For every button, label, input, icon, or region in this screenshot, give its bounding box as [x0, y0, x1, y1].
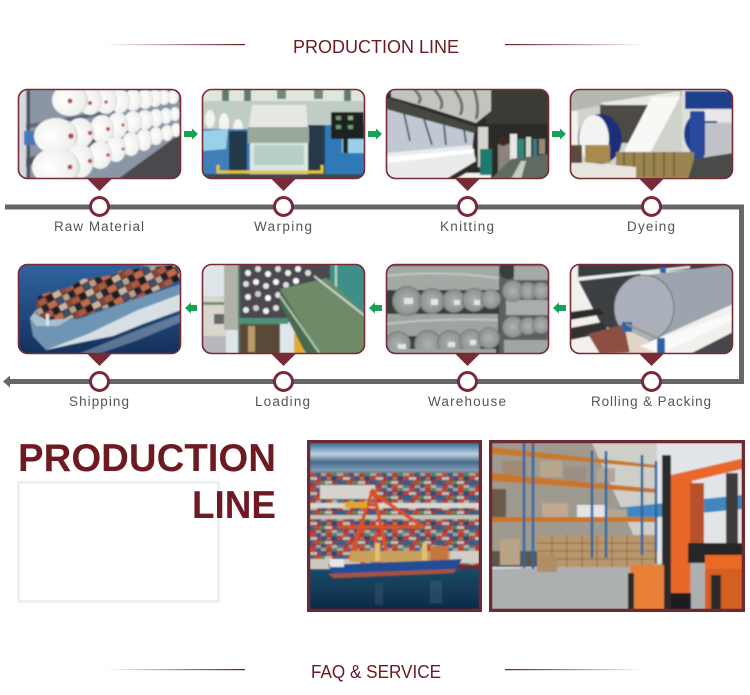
photo: warping machine: [202, 89, 365, 179]
arrow: knitting to dyeing: [552, 128, 566, 140]
photo: stacked fabric rolls: [385, 261, 550, 358]
pointer: [456, 354, 480, 366]
photo: container ship: [18, 264, 181, 354]
node: [274, 372, 292, 390]
node: [642, 372, 660, 390]
arrow: raw material to warping: [184, 128, 198, 140]
node: [90, 198, 108, 216]
step 3: knitting: [386, 89, 549, 234]
pointer: [640, 354, 664, 366]
pointer: [640, 179, 664, 191]
label: Loading: [255, 394, 310, 409]
pointer: [88, 354, 112, 366]
large heading: production line: LINE: [192, 484, 276, 527]
label: Dyeing: [627, 219, 675, 234]
step 6: warehouse: [385, 261, 550, 409]
large heading: production line: [18, 437, 276, 527]
top heading: production line: PRODUCTION LINE: [293, 37, 459, 57]
photo: yarn spools: [18, 88, 182, 180]
label: Rolling & Packing: [591, 394, 711, 409]
node: [90, 372, 108, 390]
step 8: shipping: [18, 264, 181, 409]
step 2: warping: [202, 89, 365, 234]
photo: warehouse with forklift: [489, 440, 745, 612]
photo: dyeing machinery: [570, 89, 733, 179]
label: Raw Material: [54, 219, 144, 234]
node: [274, 198, 292, 216]
arrow: rolling to warehouse: [553, 302, 566, 314]
pointer: [456, 179, 480, 191]
photo: loading conveyor: [202, 264, 365, 354]
pointer: [88, 179, 112, 191]
arrow: loading to shipping: [185, 302, 197, 314]
pointer: [272, 354, 296, 366]
photo: rolling machine: [570, 264, 733, 354]
node: [458, 372, 476, 390]
arrow: warping to knitting: [368, 128, 382, 140]
photo: knitting hall: [386, 89, 549, 179]
timeline path: [3, 204, 744, 388]
label: Warehouse: [428, 394, 506, 409]
step 5: rolling and packing: [570, 264, 733, 409]
arrow: warehouse to loading: [369, 302, 382, 314]
photo: container port: [307, 440, 482, 612]
large heading: production line: PRODUCTION: [18, 437, 276, 480]
label: Shipping: [69, 394, 129, 409]
step 4: dyeing: [570, 89, 733, 234]
step 1: raw material: [18, 84, 181, 234]
bottom heading: faq and service: FAQ & SERVICE: [311, 662, 441, 682]
step 7: loading: [202, 264, 365, 409]
label: Knitting: [440, 219, 494, 234]
empty outlined box: [18, 482, 218, 602]
node: [642, 198, 660, 216]
label: Warping: [254, 219, 312, 234]
pointer: [272, 179, 296, 191]
node: [458, 198, 476, 216]
